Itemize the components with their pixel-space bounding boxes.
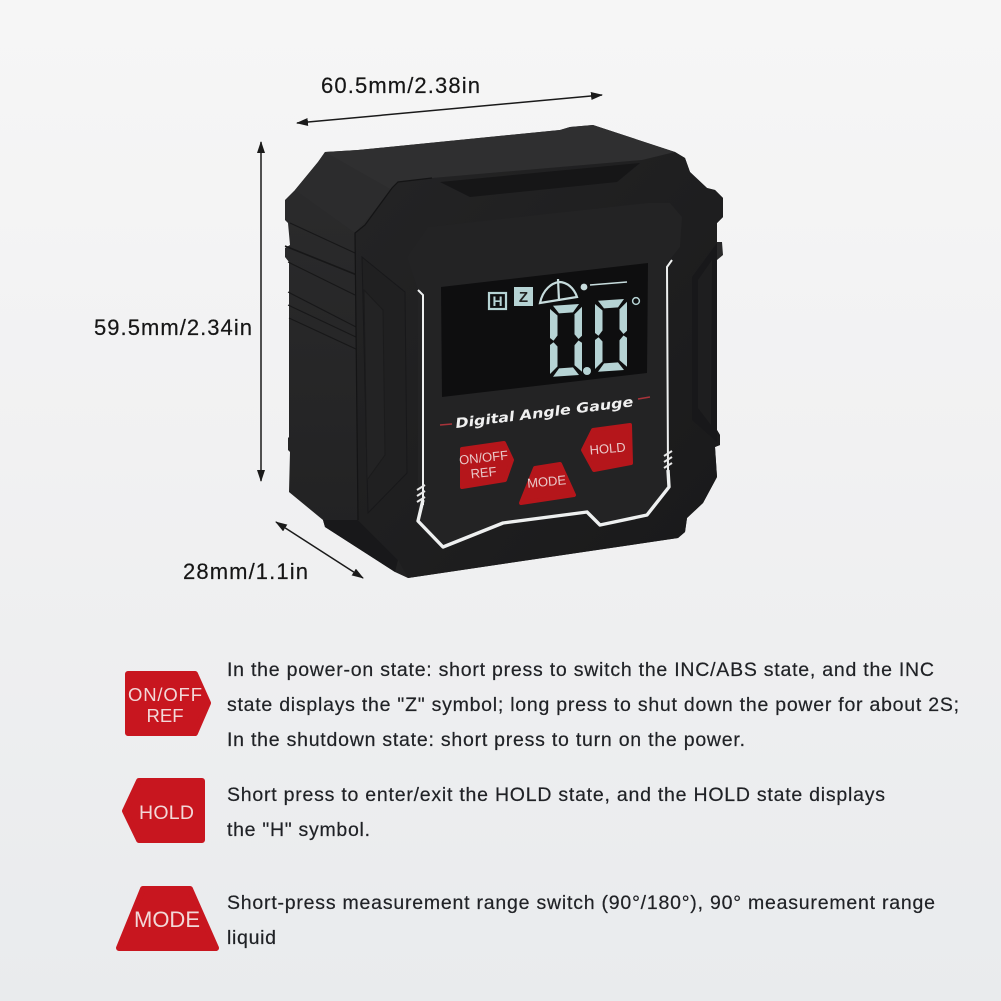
legend: MODE xyxy=(119,889,935,949)
description: liquid xyxy=(227,927,276,949)
legend: ON/OFF REF xyxy=(128,659,959,751)
device side body xyxy=(285,125,723,578)
product: digital angle gauge xyxy=(285,125,723,578)
top face xyxy=(318,125,675,233)
indicator H: H xyxy=(492,293,503,309)
indicator Z: Z xyxy=(519,289,528,306)
side ridges xyxy=(285,200,358,350)
top recess xyxy=(440,163,640,197)
white trim line lower xyxy=(418,470,669,547)
icon: ON/OFF REF button xyxy=(128,674,208,733)
description: Short-press measurement range switch (90°/180°), 90° measurement range xyxy=(227,892,935,914)
device button MODE xyxy=(521,464,574,503)
description: state displays the "Z" symbol; long press to shut down the power for about 2S; xyxy=(227,694,959,716)
device button ON/OFF REF xyxy=(458,443,512,487)
digit 0 xyxy=(595,299,627,372)
right grip xyxy=(692,243,717,442)
decimal point xyxy=(583,367,591,375)
description: In the shutdown state: short press to turn on the power. xyxy=(227,729,745,751)
description: the "H" symbol. xyxy=(227,819,370,841)
icon: HOLD button xyxy=(125,781,202,840)
dimension: height: 59.5mm/2.34in xyxy=(94,315,252,340)
icon: ON/OFF REF button: ON/OFF xyxy=(128,684,202,705)
front face xyxy=(355,152,723,578)
description xyxy=(227,892,935,949)
level icon xyxy=(540,279,577,303)
icon: HOLD button: HOLD xyxy=(139,802,194,824)
device button ON/OFF REF: REF xyxy=(470,464,497,481)
degree symbol xyxy=(633,298,639,304)
level indicator dot and line xyxy=(581,282,627,290)
device button HOLD xyxy=(583,425,631,470)
dimension: depth xyxy=(183,522,363,584)
device button ON/OFF REF: ON/OFF xyxy=(458,447,509,468)
description xyxy=(227,784,885,841)
legend: HOLD xyxy=(125,781,885,841)
device label: Digital Angle Gauge xyxy=(455,394,634,432)
icon: ON/OFF REF button: REF xyxy=(146,705,184,726)
description xyxy=(227,659,959,751)
indicator H xyxy=(489,293,506,309)
bottom left foot xyxy=(323,520,398,572)
dimension: width: 60.5mm/2.38in xyxy=(321,73,480,98)
left grip xyxy=(362,257,407,513)
digit 0 xyxy=(550,304,582,377)
front edge highlight xyxy=(355,178,432,520)
inner panel xyxy=(407,203,682,549)
indicator Z xyxy=(514,287,533,306)
icon: MODE button xyxy=(119,889,216,948)
description: In the power-on state: short press to switch the INC/ABS state, and the INC xyxy=(227,659,934,681)
dimension: depth: 28mm/1.1in xyxy=(183,559,308,584)
icon: MODE button: MODE xyxy=(134,907,200,932)
dimension: width xyxy=(297,73,602,123)
trim ticks xyxy=(417,451,672,502)
device button HOLD: HOLD xyxy=(589,439,626,458)
white trim line upper xyxy=(418,290,423,505)
description: Short press to enter/exit the HOLD state, and the HOLD state displays xyxy=(227,784,885,806)
device button MODE: MODE xyxy=(527,472,567,491)
LCD screen xyxy=(441,263,648,397)
